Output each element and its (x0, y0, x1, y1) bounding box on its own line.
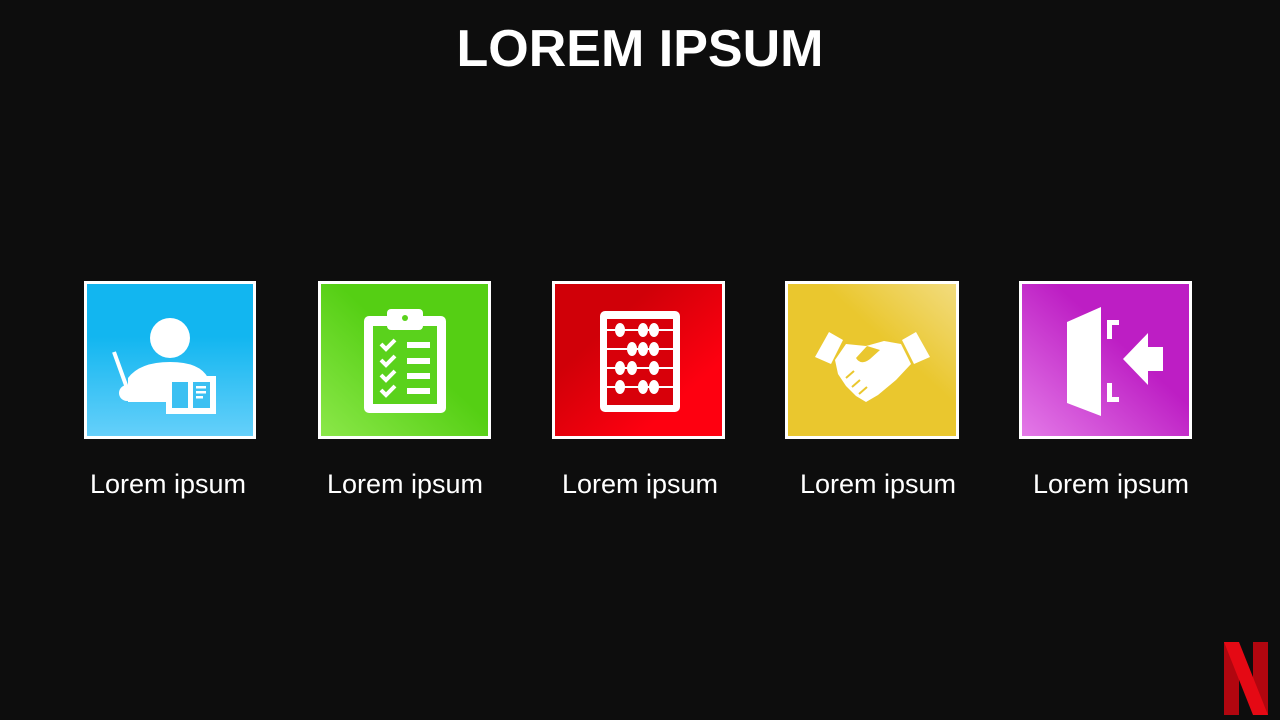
icon: abacus (600, 311, 680, 412)
label 2: Lorem ipsum (327, 469, 483, 499)
panel: abacus (554, 282, 724, 438)
label 4: Lorem ipsum (800, 469, 956, 499)
logo: N (1224, 642, 1268, 715)
label 3: Lorem ipsum (562, 469, 718, 499)
label 1: Lorem ipsum (90, 469, 246, 499)
panel: door (1020, 282, 1190, 438)
panel: clipboard (320, 282, 490, 438)
title: LOREM IPSUM (457, 20, 823, 78)
icon: handshake (815, 332, 930, 402)
icon: door (1067, 307, 1163, 416)
icon: clipboard (364, 309, 446, 413)
icon: teacher (114, 318, 216, 414)
panel: teacher (86, 282, 254, 438)
panel: handshake (786, 282, 958, 438)
label 5: Lorem ipsum (1033, 469, 1189, 499)
